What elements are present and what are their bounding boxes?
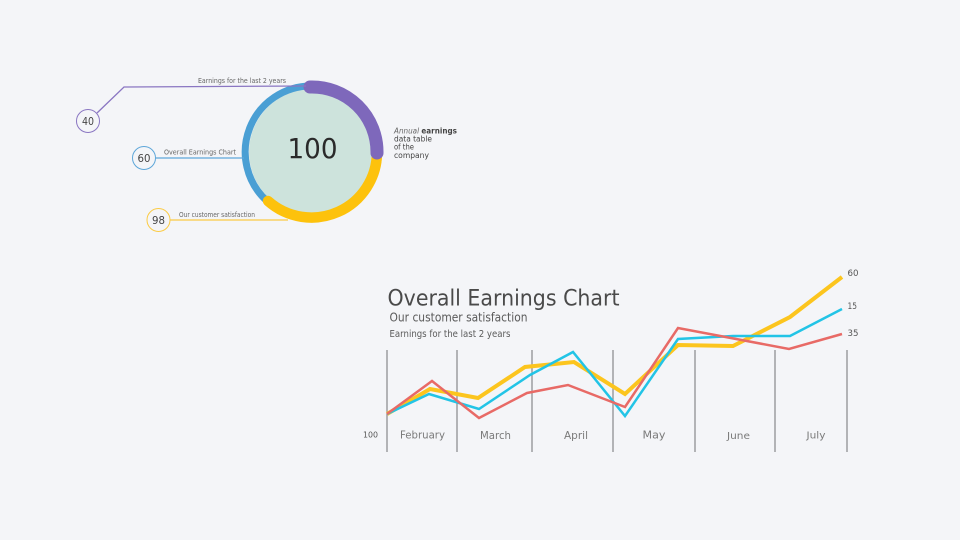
series end values: 15: [848, 302, 857, 312]
month labels: April: [564, 430, 588, 442]
line chart: [363, 269, 858, 452]
chart heading: [388, 286, 620, 340]
annual earnings note: data table: [394, 134, 432, 144]
callout: 60: Overall Earnings Chart: [164, 148, 236, 156]
month labels: February: [400, 430, 445, 442]
callout: 98: Our customer satisfaction: [179, 210, 255, 219]
callout: 60: 60: [138, 153, 150, 165]
title: Overall Earnings Chart: [388, 286, 620, 312]
annual earnings note: of the: [394, 142, 414, 152]
series end values: 60: [848, 269, 858, 279]
callout: 40: [76, 76, 306, 132]
annual earnings note: company: [394, 151, 430, 160]
donut centre disc: [249, 89, 375, 215]
series end values: 35: [848, 329, 858, 339]
series: red: [387, 328, 842, 418]
subtitle: Our customer satisfaction: [390, 310, 528, 324]
donut chart: [245, 86, 377, 218]
donut segment: purple: [310, 87, 377, 153]
month labels: May: [642, 430, 666, 442]
caption: Earnings for the last 2 years: [390, 329, 511, 340]
callout: 98: 98: [152, 215, 165, 227]
callout: 60: [132, 146, 244, 170]
callout: 40: Earnings for the last 2 years: [198, 76, 286, 85]
month labels: March: [480, 430, 511, 442]
month labels: [400, 430, 826, 442]
callout: 98: [147, 208, 288, 232]
month dividers: [387, 350, 847, 452]
donut segment: yellow: [268, 152, 377, 218]
series: yellow: [387, 277, 842, 414]
month labels: June: [726, 431, 750, 442]
annual earnings note: Annual earnings: [393, 126, 458, 136]
month labels: July: [805, 430, 826, 442]
series: cyan: [387, 309, 842, 416]
y axis label: 100: [363, 430, 378, 440]
callout: 40: 40: [82, 116, 94, 128]
donut segment: blue: [245, 86, 312, 201]
series end values: [848, 269, 858, 339]
annual earnings note: [393, 126, 458, 160]
donut centre value: 100: [288, 132, 338, 165]
